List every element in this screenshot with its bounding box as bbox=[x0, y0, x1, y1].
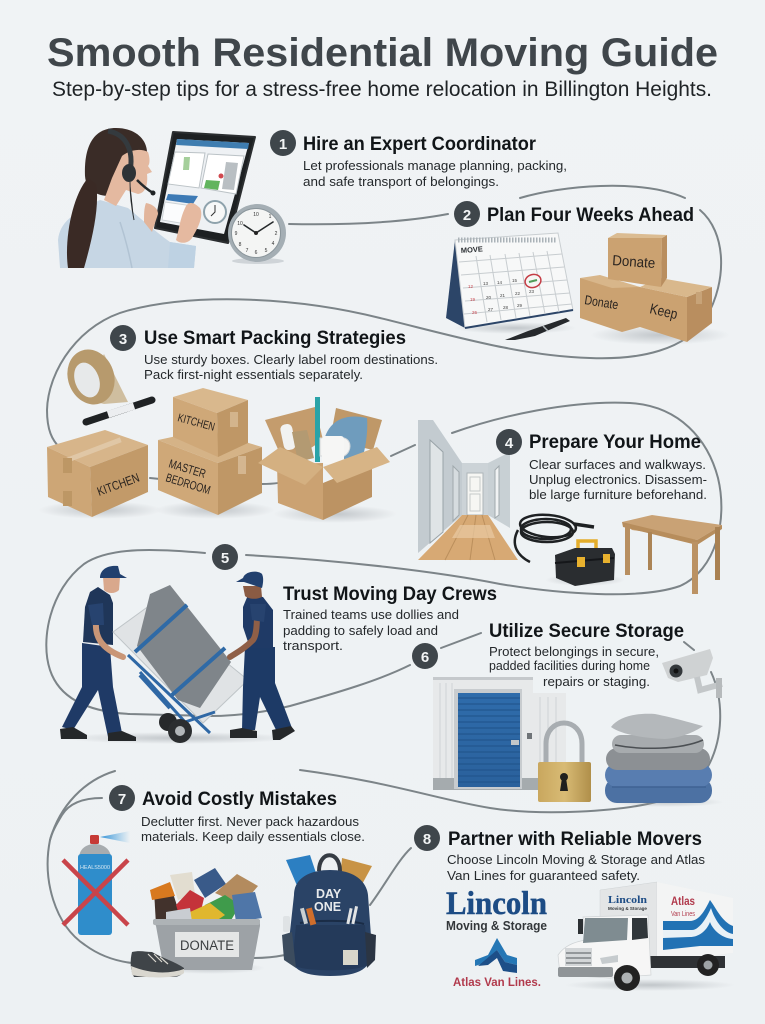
icon: power cable bbox=[515, 513, 594, 562]
step 8: badge bbox=[414, 825, 440, 851]
step 1: description: Let professionals manage planning, packing, bbox=[303, 158, 567, 173]
step 2: badge: 2 bbox=[463, 207, 471, 224]
icon: wall clock: 8 bbox=[239, 242, 242, 248]
box: Master Bedroom bbox=[158, 430, 262, 515]
step 2: calendar illustration: 20 bbox=[486, 295, 492, 300]
step 5: description: transport. bbox=[283, 638, 343, 653]
box: Master Bedroom: BEDROOM bbox=[164, 470, 212, 497]
step 6: description: Protect belongings in secure, bbox=[489, 644, 659, 659]
step 3: badge bbox=[110, 325, 136, 351]
step 6: security camera bbox=[662, 649, 722, 698]
step 4: badge: 4 bbox=[505, 435, 514, 452]
truck: Moving & Storage bbox=[608, 906, 647, 911]
box: Donate top bbox=[608, 233, 667, 287]
step 7: badge bbox=[109, 785, 135, 811]
step 7: crossed-out spray can bbox=[63, 831, 130, 935]
step 7: day one backpack: ONE bbox=[314, 900, 341, 914]
box: Donate top: Donate bbox=[612, 253, 656, 272]
step 2: calendar illustration: 14 bbox=[497, 280, 503, 285]
step 3: description: Use sturdy boxes. Clearly label room destinations. bbox=[144, 352, 438, 367]
step 4: description: ble large furniture beforehand. bbox=[529, 487, 707, 502]
truck: Van Lines bbox=[671, 911, 695, 918]
step 8: heading: Partner with Reliable Movers bbox=[448, 828, 702, 850]
step 2: calendar illustration: 23 bbox=[529, 289, 535, 294]
step 4: description: Clear surfaces and walkways. bbox=[529, 457, 706, 472]
box: Keep bbox=[640, 278, 712, 342]
icon: wall clock bbox=[228, 204, 286, 264]
step 4: heading: Prepare Your Home bbox=[529, 431, 701, 453]
step 4: cable, toolbox, table bbox=[515, 513, 722, 594]
icon: right mover bbox=[230, 572, 295, 740]
step 1: coordinator illustration bbox=[58, 128, 286, 268]
icon: tablet bbox=[155, 132, 255, 243]
icon: toolbox bbox=[555, 541, 615, 586]
step 6: description: padded facilities during home bbox=[489, 658, 650, 673]
atlas swoosh on truck bbox=[663, 900, 733, 950]
step 6: badge bbox=[412, 643, 438, 669]
logo: Lincoln Moving & Storage: Moving & Storage bbox=[446, 919, 547, 933]
step 2: heading: Plan Four Weeks Ahead bbox=[487, 204, 694, 226]
step 5: badge bbox=[212, 544, 238, 570]
step 7: description: Declutter first. Never pack hazardous bbox=[141, 814, 359, 829]
step 1: heading: Hire an Expert Coordinator bbox=[303, 133, 536, 155]
truck: Atlas bbox=[671, 894, 695, 908]
truck bbox=[558, 882, 735, 991]
step 5: description: Trained teams use dollies and bbox=[283, 607, 459, 622]
icon: wall clock: 4 bbox=[272, 241, 275, 247]
icon: left mover bbox=[60, 566, 136, 741]
step 7: description: materials. Keep daily essentials close. bbox=[141, 829, 365, 844]
step 2: calendar illustration: 26 bbox=[472, 310, 478, 315]
step 7: heading: Avoid Costly Mistakes bbox=[142, 788, 337, 810]
icon: wall clock: 1 bbox=[269, 214, 272, 220]
box: Kitchen top: KITCHEN bbox=[176, 412, 216, 434]
connector path linking the steps bbox=[46, 186, 721, 963]
step 4: badge bbox=[496, 429, 522, 455]
box: Kitchen front bbox=[47, 430, 148, 517]
step 2: calendar illustration: 21 bbox=[500, 293, 506, 298]
step 6: moving blankets bbox=[605, 714, 723, 807]
step 2: calendar illustration: 28 bbox=[503, 305, 509, 310]
icon: wall clock: 7 bbox=[246, 248, 249, 254]
step 7: sneaker bbox=[131, 951, 184, 977]
step 8: description: Van Lines for guaranteed safety. bbox=[447, 868, 640, 883]
box: Kitchen front: KITCHEN bbox=[95, 471, 141, 499]
icon: woman with headset bbox=[58, 128, 201, 268]
step 8: description: Choose Lincoln Moving & Storage and Atlas bbox=[447, 852, 705, 867]
step 2: calendar illustration: 13 bbox=[483, 281, 489, 286]
icon: marker bbox=[86, 400, 152, 422]
step 5: movers with dolly bbox=[60, 566, 295, 744]
step 2: badge bbox=[454, 201, 480, 227]
step 6: heading: Utilize Secure Storage bbox=[489, 620, 684, 642]
icon: wall clock: 10 bbox=[253, 212, 259, 218]
box: Kitchen top bbox=[173, 388, 248, 457]
box: Donate left bbox=[580, 275, 640, 332]
step 5: description: padding to safely load and bbox=[283, 623, 438, 638]
box: open box with essentials bbox=[258, 397, 390, 520]
logo: Lincoln Moving & Storage: Lincoln bbox=[446, 886, 547, 922]
step 3: cardboard boxes bbox=[38, 388, 397, 523]
step 8: badge: 8 bbox=[423, 831, 431, 848]
step 2: calendar illustration: MOVE bbox=[461, 244, 483, 255]
step 2: calendar illustration: 15 bbox=[512, 278, 518, 283]
icon: wooden table bbox=[622, 515, 722, 594]
step 2: calendar illustration: 19 bbox=[470, 297, 476, 302]
step 3: badge: 3 bbox=[119, 331, 127, 348]
step 2: calendar illustration: 12 bbox=[468, 284, 474, 289]
box: Master Bedroom: MASTER bbox=[167, 456, 208, 481]
icon: wall clock: 2 bbox=[275, 231, 278, 237]
step 3: tape and marker bbox=[60, 343, 152, 422]
icon: packing tape bbox=[60, 343, 128, 411]
step 2: labelled boxes bbox=[580, 233, 730, 345]
icon: hand truck and draped appliance bbox=[113, 585, 248, 743]
step 1: description: and safe transport of belongings. bbox=[303, 174, 499, 189]
box: Donate left: Donate bbox=[584, 292, 619, 312]
step 6: description: repairs or staging. bbox=[543, 674, 650, 689]
step 2: calendar illustration bbox=[446, 233, 577, 340]
step 1: badge: 1 bbox=[279, 136, 287, 153]
icon: wall clock: 6 bbox=[255, 250, 258, 256]
icon: wall clock: 10 bbox=[237, 221, 243, 227]
step 2: calendar illustration: 29 bbox=[517, 303, 523, 308]
step 5: heading: Trust Moving Day Crews bbox=[283, 583, 497, 605]
step 6: storage unit bbox=[433, 677, 566, 790]
step 1: badge bbox=[270, 130, 296, 156]
box: Keep: Keep bbox=[648, 301, 679, 323]
step 6: badge: 6 bbox=[421, 649, 429, 666]
step 5: badge: 5 bbox=[221, 550, 229, 567]
step 7: badge: 7 bbox=[118, 791, 126, 808]
step 4: hallway illustration bbox=[418, 420, 518, 560]
title: Smooth Residential Moving Guide bbox=[47, 31, 718, 75]
logo: Atlas Van Lines bbox=[453, 938, 541, 989]
step 7: crossed-out spray can: HEALS5000 bbox=[80, 865, 110, 871]
step 3: heading: Use Smart Packing Strategies bbox=[144, 327, 406, 349]
truck: Lincoln bbox=[608, 894, 647, 906]
icon: wall clock: 9 bbox=[235, 231, 238, 237]
icon: wall clock: 5 bbox=[265, 248, 268, 254]
step 6: padlock bbox=[538, 723, 591, 802]
step 7: donate bin with clothes bbox=[150, 868, 265, 974]
step 7: day one backpack bbox=[282, 855, 376, 976]
step 2: calendar illustration: 22 bbox=[515, 291, 521, 296]
step 7: day one backpack: DAY bbox=[316, 887, 342, 901]
label: donate: DONATE bbox=[180, 938, 234, 953]
icon: pen bbox=[505, 318, 570, 340]
step 4: description: Unplug electronics. Disassem- bbox=[529, 472, 707, 487]
logo: Atlas Van Lines: Atlas Van Lines. bbox=[453, 975, 541, 989]
step 2: calendar illustration: 27 bbox=[488, 307, 494, 312]
subtitle: Step-by-step tips for a stress-free home relocation in Billington Heights. bbox=[52, 78, 712, 101]
step 3: description: Pack first-night essentials separately. bbox=[144, 367, 363, 382]
